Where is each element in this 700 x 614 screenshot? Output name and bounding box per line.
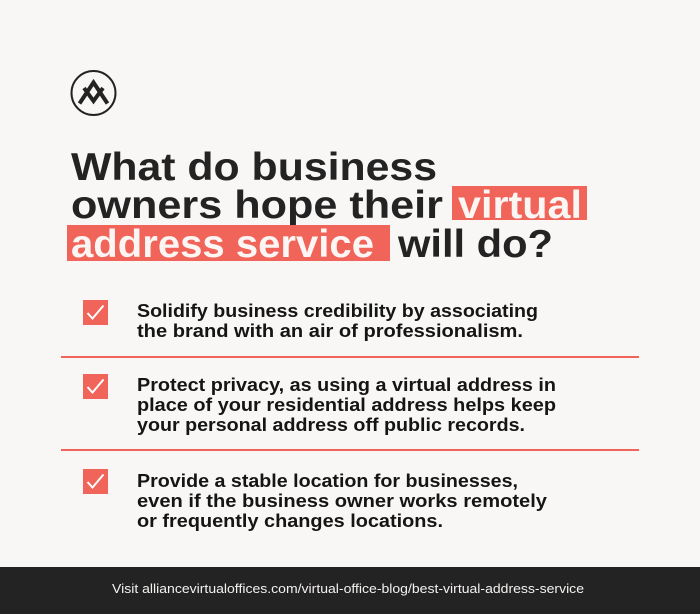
- footer bar: [0, 567, 700, 614]
- text: privacy: [137, 374, 556, 435]
- text: stable location: even if the business owner works remotely: [137, 490, 548, 511]
- icon: checkbox 3: [83, 469, 108, 494]
- footer bar: Visit alliancevirtualoffices.com/virtual-office-blog/best-virtual-address-service: [112, 582, 584, 596]
- item 3: [83, 469, 548, 531]
- item 1: [83, 300, 538, 341]
- icon: alliance logo: [72, 71, 116, 115]
- icon: checkbox 1: [83, 300, 108, 325]
- text: credibility: Solidify business credibility by associating: [137, 300, 538, 321]
- text: stable location: Provide a stable location for businesses,: [137, 470, 518, 491]
- text: privacy: Protect privacy, as using a virtual address in: [137, 374, 556, 395]
- text: stable location: or frequently changes locations.: [137, 510, 443, 531]
- text: credibility: [137, 300, 538, 341]
- text: privacy: your personal address off public records.: [137, 414, 525, 435]
- title: will do?: [397, 223, 553, 266]
- title: What do business: [71, 146, 437, 189]
- icon: checkbox 2: [83, 374, 108, 399]
- highlight: virtual: virtual: [458, 184, 582, 227]
- title: [67, 146, 587, 266]
- text: credibility: the brand with an air of professionalism.: [137, 320, 523, 341]
- text: privacy: place of your residential address helps keep: [137, 394, 556, 415]
- title: owners hope their: [71, 184, 443, 227]
- highlight: address service: address service: [71, 223, 374, 266]
- item 2: [83, 374, 556, 435]
- text: stable location: [137, 470, 548, 531]
